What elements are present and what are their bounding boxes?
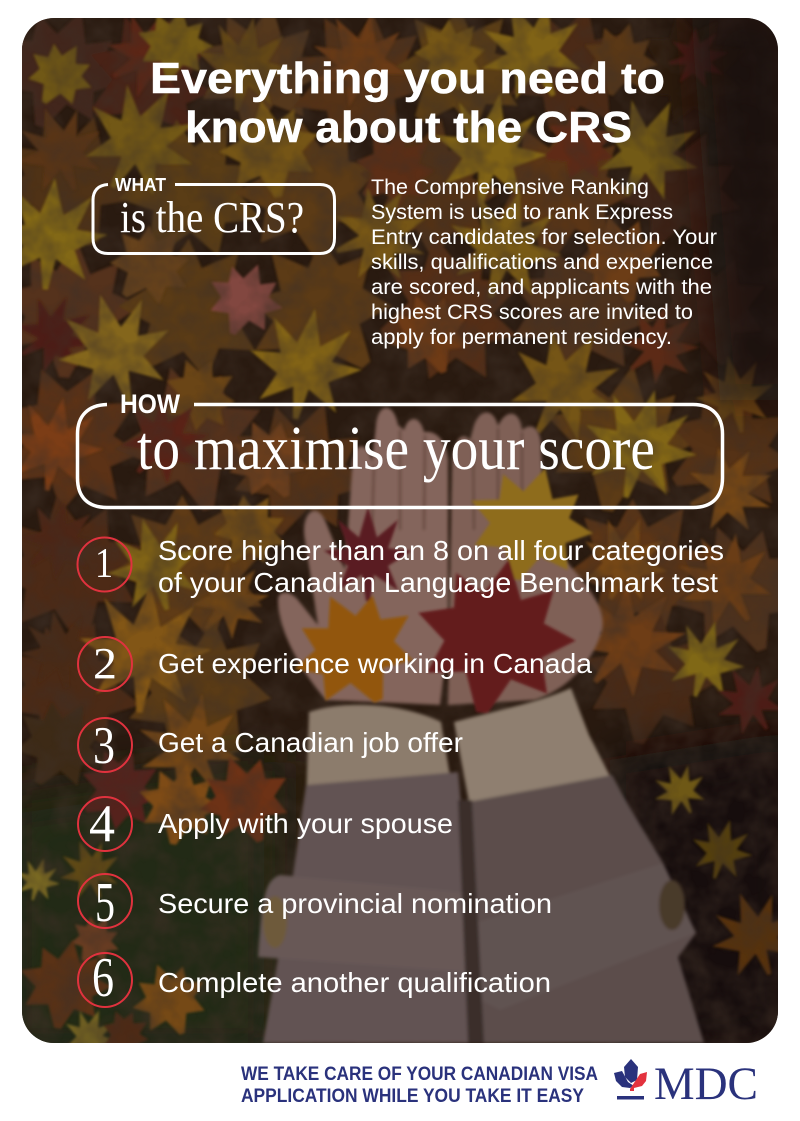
dark lower right ground: [612, 719, 778, 1043]
description paragraph: System is used to rank Express: [371, 201, 673, 224]
title: [150, 54, 665, 152]
description paragraph: The Comprehensive Ranking: [371, 176, 649, 199]
coat sleeves and cuffs: [258, 688, 704, 1043]
footer tagline: [241, 1064, 598, 1107]
step 1: Score higher than an 8 on all four categories: [158, 535, 724, 566]
finger gaps: [372, 428, 522, 530]
heading box: what is the CRS: is the CRS?: [120, 193, 304, 242]
leaves held in hands: [294, 469, 593, 714]
step 5: [78, 872, 552, 934]
description paragraph: Entry candidates for selection. Your: [371, 226, 717, 249]
title: Everything you need to: [150, 54, 665, 103]
description paragraph: [371, 176, 717, 349]
step 2: Get experience working in Canada: [158, 648, 592, 679]
step 3: Get a Canadian job offer: [158, 727, 463, 758]
hands: [278, 408, 603, 705]
footer tagline: APPLICATION WHILE YOU TAKE IT EASY: [241, 1086, 584, 1107]
step 1: of your Canadian Language Benchmark test: [158, 567, 718, 598]
step 6: Complete another qualification: [158, 967, 551, 998]
heading box: how to maximise your score: to maximise your score: [137, 415, 655, 483]
step 4: [78, 795, 453, 853]
heading box: what is the CRS: [93, 175, 334, 254]
moss ground: [0, 760, 280, 1060]
step 2: [78, 637, 592, 691]
step 6: [78, 947, 551, 1009]
step 5: Secure a provincial nomination: [158, 888, 552, 919]
heading box: how to maximise your score: HOW: [120, 389, 180, 419]
step 5: 5: [95, 872, 115, 934]
heading box: how to maximise your score: [78, 389, 722, 508]
title: know about the CRS: [185, 103, 632, 152]
step 3: 3: [93, 717, 115, 775]
right side shadow: [690, 0, 800, 400]
step 3: [78, 717, 463, 775]
step 4: 4: [89, 795, 115, 853]
heading box: what is the CRS: WHAT: [115, 175, 166, 195]
step 1: 1: [95, 541, 113, 587]
step 4: Apply with your spouse: [158, 808, 453, 839]
step 6: 6: [92, 947, 114, 1009]
description paragraph: are scored, and applicants with the: [371, 276, 712, 299]
step 2: 2: [93, 639, 117, 688]
step 1: [78, 535, 724, 598]
description paragraph: highest CRS scores are invited to: [371, 301, 693, 324]
MDC logo: MDC: [654, 1058, 758, 1110]
description paragraph: skills, qualifications and experience: [371, 251, 713, 274]
scattered leaves: under layer: [22, 18, 778, 754]
footer tagline: WE TAKE CARE OF YOUR CANADIAN VISA: [241, 1064, 598, 1085]
description paragraph: apply for permanent residency.: [371, 326, 672, 349]
